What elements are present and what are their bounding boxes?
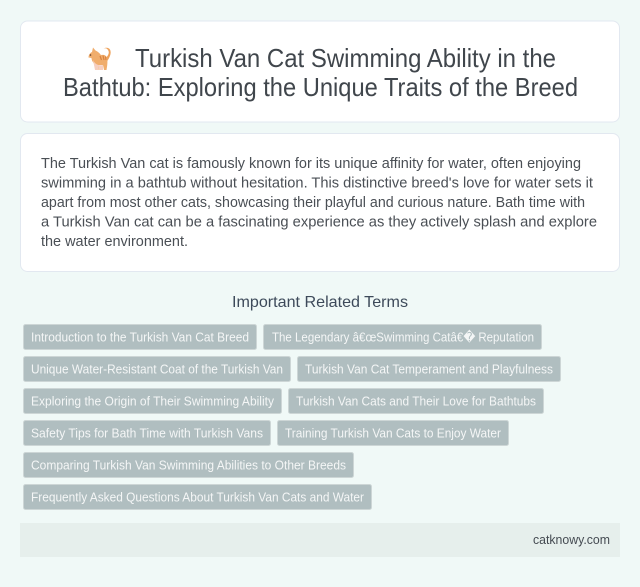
tag: Frequently Asked Questions About Turkish Van Cats and Water bbox=[31, 490, 365, 504]
panel: intro paragraph: swimming in a bathtub without hesitation. This distinctive breed's love for water sets it bbox=[41, 174, 594, 192]
tag: Introduction to the Turkish Van Cat Breed bbox=[31, 330, 249, 344]
tag: Training Turkish Van Cats to Enjoy Water bbox=[285, 426, 502, 440]
tag list bbox=[24, 324, 560, 510]
panel: intro paragraph: a Turkish Van cat can be a fascinating experience as they actively splash and explore bbox=[41, 214, 597, 230]
tag: Comparing Turkish Van Swimming Abilities to Other Breeds bbox=[31, 458, 346, 472]
tag bbox=[24, 324, 256, 350]
icon: orange cat bbox=[88, 48, 111, 70]
panel: intro paragraph bbox=[20, 134, 620, 272]
tag bbox=[288, 388, 544, 414]
heading: related terms: Important Related Terms bbox=[232, 294, 408, 311]
tag bbox=[24, 356, 290, 382]
title line 2: Bathtub: Exploring the Unique Traits of the Breed bbox=[63, 74, 578, 102]
tag: Exploring the Origin of Their Swimming Ability bbox=[31, 394, 275, 408]
footer bbox=[20, 523, 620, 557]
tag bbox=[298, 356, 560, 382]
tag bbox=[264, 324, 542, 350]
title line 1: Turkish Van Cat Swimming Ability in the bbox=[135, 45, 556, 73]
tag bbox=[278, 420, 508, 446]
panel: intro paragraph: The Turkish Van cat is famously known for its unique affinity for water, often enjoying bbox=[41, 155, 581, 172]
tag bbox=[24, 388, 282, 414]
footer: catknowy.com bbox=[533, 532, 610, 547]
tag: Unique Water-Resistant Coat of the Turkish Van bbox=[31, 362, 283, 376]
tag bbox=[24, 420, 270, 446]
tag: Turkish Van Cat Temperament and Playfulness bbox=[305, 362, 553, 376]
panel: title card bbox=[20, 21, 620, 122]
panel: intro paragraph: apart from most other cats, showcasing their playful and curious nature. Bath time with bbox=[41, 194, 585, 211]
tag bbox=[24, 484, 372, 510]
tag: The Legendary â€œSwimming Catâ€� Reputation bbox=[272, 330, 534, 344]
tag: Turkish Van Cats and Their Love for Bathtubs bbox=[296, 394, 536, 408]
tag: Safety Tips for Bath Time with Turkish Vans bbox=[31, 426, 263, 440]
panel: intro paragraph: the water environment. bbox=[41, 233, 188, 250]
tag bbox=[24, 452, 354, 478]
